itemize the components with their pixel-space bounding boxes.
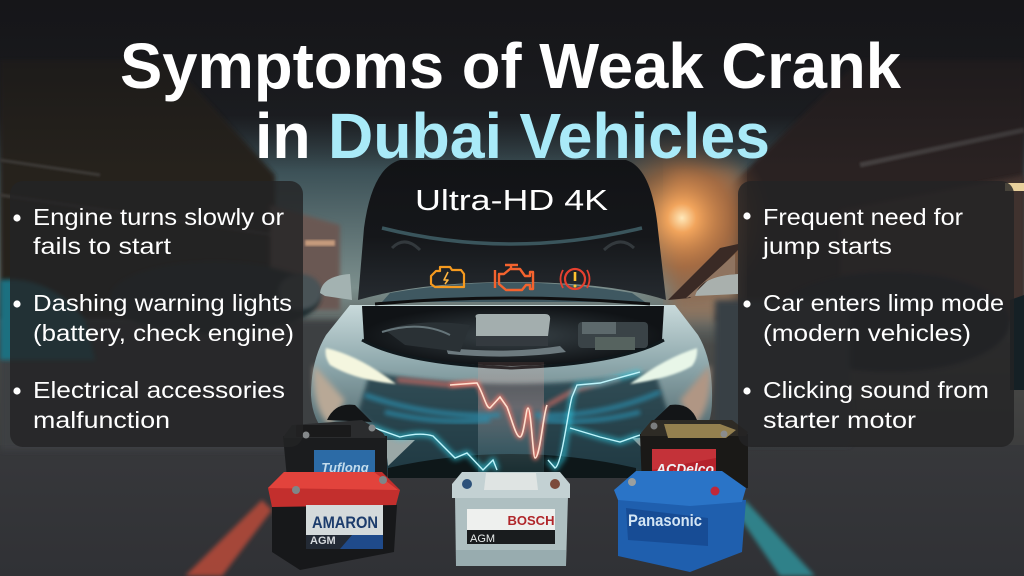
- warning icons on hood: [431, 265, 590, 290]
- battery: Amaron: [268, 472, 400, 570]
- symptom: clicking sound: [743, 377, 989, 433]
- top dark fade: [0, 0, 1024, 170]
- symptom: limp mode: Car enters limp mode: [763, 290, 1004, 316]
- icon: check engine: [495, 265, 533, 290]
- battery: Amaron: AGM: [310, 535, 336, 547]
- symptom: warning lights: [13, 290, 294, 346]
- symptom: accessories: [13, 377, 285, 433]
- symptom: slow engine: fails to start: [33, 233, 172, 259]
- battery: Tuflong: Tuflong: [321, 460, 369, 475]
- symptom: jump starts: Frequent need for: [763, 204, 963, 230]
- battery: Panasonic: Panasonic: [628, 511, 702, 530]
- symptom: limp mode: [743, 290, 1004, 346]
- car body: [311, 305, 712, 472]
- symptom: slow engine: Engine turns slowly or: [33, 204, 284, 230]
- symptom: warning lights: Dashing warning lights: [33, 290, 292, 316]
- engine bay: [362, 306, 664, 366]
- icon: brake warning: [560, 269, 590, 289]
- warm flank highlights: [314, 365, 710, 425]
- panel: right symptoms: [738, 181, 1014, 447]
- panel: left symptoms: [10, 181, 303, 447]
- title: [120, 30, 901, 172]
- headlights: [326, 348, 396, 384]
- open hood: [358, 160, 666, 300]
- battery: Amaron: AMARON: [312, 513, 378, 532]
- lower grille: [358, 372, 668, 472]
- symptom: clicking sound: starter motor: [763, 407, 916, 433]
- battery: Bosch: [452, 472, 570, 566]
- battery: Tuflong: [283, 420, 387, 478]
- battery: ACDelco: [640, 420, 748, 488]
- batteries: [268, 420, 748, 572]
- symptom: limp mode: (modern vehicles): [763, 320, 971, 346]
- bumper highlights: [385, 440, 415, 466]
- symptom: jump starts: [743, 204, 963, 259]
- battery: Bosch: AGM: [470, 533, 495, 545]
- energy waveform: [365, 362, 660, 474]
- car: [311, 160, 738, 478]
- title: Symptoms of Weak Crank: [120, 30, 901, 102]
- symptom: slow engine: [13, 204, 284, 259]
- engine parts: [382, 314, 648, 357]
- symptom: accessories: malfunction: [33, 407, 170, 433]
- symptom: jump starts: jump starts: [762, 233, 892, 259]
- symptom: warning lights: (battery, check engine): [33, 320, 294, 346]
- subtitle: Ultra-HD 4K: [415, 185, 609, 217]
- red and blue floor light streaks: [185, 500, 815, 576]
- wheel arches: [327, 405, 372, 422]
- icon: battery warning: [431, 267, 464, 287]
- battery: Bosch: BOSCH: [508, 513, 554, 528]
- battery: Panasonic: [614, 471, 746, 572]
- title: in Dubai Vehicles: [255, 100, 770, 172]
- battery: ACDelco: ACDelco: [655, 461, 714, 478]
- mirrors: [320, 274, 352, 300]
- symptom: accessories: Electrical accessories: [33, 377, 285, 403]
- symptom: clicking sound: Clicking sound from: [763, 377, 989, 403]
